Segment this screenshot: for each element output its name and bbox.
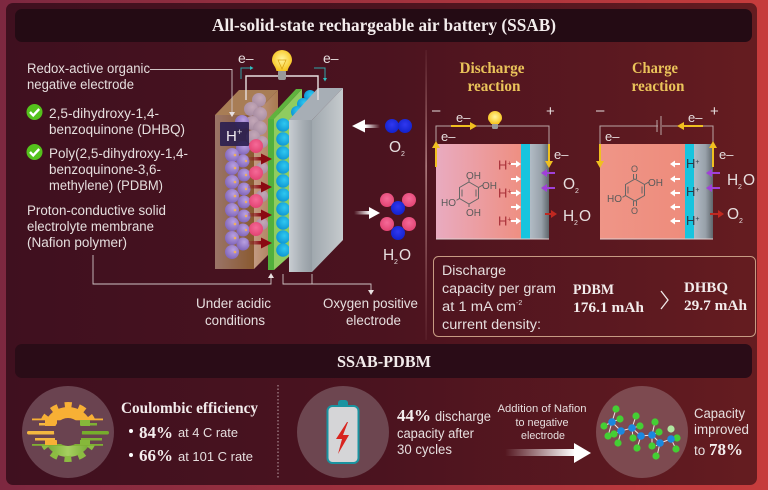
proton label: +	[237, 127, 242, 137]
polarity: –	[432, 102, 441, 119]
text block: capacity improved: 78%	[709, 440, 743, 459]
electrolyte membrane	[268, 89, 302, 270]
PDBM value: PDBM	[573, 282, 614, 298]
reaction species: H	[727, 172, 738, 189]
icon: polymer molecule	[596, 386, 688, 478]
text block: 44% discharge capacity	[397, 406, 491, 457]
capacity description: current density:	[442, 317, 541, 332]
proton labels: H	[686, 213, 695, 228]
capacity description: capacity per gram	[442, 281, 556, 296]
electron labels and arrows: e–	[238, 50, 254, 66]
proton labels: +	[695, 187, 699, 194]
proton flow arrows	[511, 160, 521, 224]
text block: capacity improved: Capacity	[694, 406, 745, 421]
polarity	[596, 102, 719, 120]
proton labels: H	[498, 186, 507, 200]
capacity description: at 1 mA cm	[442, 299, 516, 314]
title bar	[15, 9, 752, 42]
text block: 44% discharge capacity: 44%	[397, 406, 431, 425]
electron labels and arrows: e–	[323, 50, 339, 66]
reaction species: H	[563, 208, 574, 225]
O2 input: 2	[401, 151, 405, 158]
polarity	[432, 102, 555, 120]
leader arrowheads	[229, 112, 374, 295]
text block: 44% discharge capacity: capacity after	[397, 426, 474, 441]
text block: Coulombic efficiency: at 4 C rate	[178, 426, 238, 440]
text block: capacity improved	[694, 406, 749, 459]
power source symbol	[657, 116, 661, 135]
text block: addition of Nafion: Addition of Nafion	[498, 403, 586, 415]
text block: under acidic conditions: Under acidic	[196, 296, 271, 311]
reaction species: 2	[575, 188, 579, 195]
PDBM value: 176.1 mAh	[573, 300, 645, 316]
light bulb	[272, 50, 292, 80]
electron arrows: e–	[719, 147, 734, 162]
text block: 44% discharge capacity: 30 cycles	[397, 442, 452, 457]
proton labels: +	[507, 216, 511, 224]
list item: DHBQ: benzoquinone (DHBQ)	[49, 122, 185, 137]
H2O output: 2	[394, 259, 398, 266]
diagram: charge cell	[596, 102, 755, 240]
list item: PDBM: methylene) (PDBM)	[49, 178, 163, 193]
text block: negative electrode: negative electrode	[27, 77, 134, 92]
water and oxygen arrows	[706, 169, 724, 218]
quinone structure	[607, 164, 663, 216]
heading: discharge reaction	[460, 60, 525, 95]
text block: Coulombic efficiency: at 101 C rate	[178, 450, 253, 464]
H2O output	[354, 193, 416, 266]
section bar: SSAB-PDBM	[15, 344, 752, 378]
text block: membrane: electrolyte membrane	[27, 219, 154, 234]
DHBQ hydroquinone structure: HO	[441, 198, 456, 209]
text block: oxygen positive electrode: Oxygen positive	[323, 296, 418, 311]
quinone structure: O	[631, 206, 638, 216]
list item: DHBQ	[26, 104, 185, 137]
text block: Coulombic efficiency: 66%	[139, 446, 173, 465]
list item: PDBM: benzoquinone-3,6-	[49, 162, 161, 177]
text block: Coulombic efficiency: 84%	[139, 423, 173, 442]
text block: addition of Nafion: to negative	[516, 417, 568, 429]
small bulb	[488, 111, 502, 129]
cell body	[436, 126, 549, 240]
oxygen electrode plate	[289, 88, 343, 272]
text block: membrane	[27, 203, 166, 250]
proton arrows	[248, 154, 272, 248]
heading: charge reaction	[632, 60, 685, 95]
proton labels: +	[695, 159, 699, 166]
list item: PDBM	[26, 144, 188, 193]
DHBQ value: 29.7 mAh	[684, 298, 748, 314]
polarity: –	[596, 102, 605, 119]
text block: negative electrode: Redox-active organic	[27, 61, 150, 76]
electron arrows: e–	[441, 129, 456, 144]
greater-than symbol	[661, 291, 668, 309]
leader lines	[93, 70, 371, 290]
oxygen and water arrows	[541, 169, 557, 218]
DHBQ value: DHBQ	[684, 280, 728, 296]
proton labels	[686, 156, 699, 228]
DHBQ hydroquinone structure: OH	[466, 208, 481, 219]
proton labels: +	[507, 160, 511, 168]
DHBQ hydroquinone structure: OH	[482, 181, 497, 192]
quinone structure: HO	[607, 194, 622, 205]
text block: Coulombic efficiency	[121, 400, 258, 465]
text block: capacity improved: improved	[694, 422, 749, 437]
polarity: +	[710, 103, 719, 120]
icon: battery	[297, 386, 389, 478]
text block: addition of Nafion	[498, 403, 586, 442]
electron arrows: e–	[605, 129, 620, 144]
heading: charge reaction: reaction	[632, 78, 685, 95]
DHBQ value	[684, 280, 748, 314]
H2O output: O	[399, 247, 411, 264]
electron arrows	[596, 110, 734, 168]
icon: gear	[22, 386, 114, 478]
reaction species: 2	[574, 220, 578, 227]
reaction species	[727, 172, 755, 225]
text block: negative electrode	[27, 61, 150, 92]
section bar: SSAB-PDBM: SSAB-PDBM	[337, 352, 431, 371]
DHBQ hydroquinone structure: OH	[466, 171, 481, 182]
electron arrows: e–	[554, 147, 569, 162]
O2 input	[352, 119, 412, 158]
reaction species: O	[727, 206, 739, 223]
callout: discharge capacity comparison	[434, 256, 756, 336]
capacity description: -2	[516, 300, 522, 307]
title bar: All-solid-state rechargeable air battery (SSAB)	[212, 15, 556, 35]
proton labels: +	[695, 216, 699, 223]
quinone structure: O	[631, 164, 638, 174]
capacity description	[442, 263, 556, 332]
reaction species: 2	[738, 184, 742, 191]
reaction species: 2	[739, 218, 743, 225]
list item: DHBQ: 2,5-dihydroxy-1,4-	[49, 106, 159, 121]
diagram: discharge cell	[432, 102, 591, 240]
quinone structure: OH	[648, 178, 663, 189]
positive electrode spheres	[276, 90, 316, 257]
heading: discharge reaction: Discharge	[460, 60, 525, 77]
heading: charge reaction: Charge	[632, 60, 678, 77]
polarity: +	[546, 103, 555, 120]
protons	[249, 139, 263, 236]
proton labels: H	[686, 156, 695, 171]
reaction species: O	[579, 208, 591, 225]
text block: 44% discharge capacity: discharge	[435, 409, 491, 424]
text block: oxygen positive electrode: electrode	[346, 313, 401, 328]
reaction species	[563, 176, 591, 227]
text block: under acidic conditions: conditions	[205, 313, 265, 328]
text block: membrane: (Nafion polymer)	[27, 235, 127, 250]
DHBQ hydroquinone structure	[441, 171, 497, 219]
cell body	[600, 126, 713, 240]
reaction species: O	[743, 172, 755, 189]
reaction species: O	[563, 176, 575, 193]
proton labels: H	[498, 214, 507, 228]
text block: Coulombic efficiency: Coulombic efficiency	[121, 400, 258, 417]
text block: capacity improved: to	[694, 443, 705, 458]
electron labels and arrows	[238, 50, 339, 82]
electron arrows: e–	[456, 110, 471, 125]
proton label	[220, 122, 249, 146]
electron arrows	[432, 110, 569, 168]
text block: under acidic conditions	[196, 296, 271, 328]
capacity description: Discharge	[442, 263, 506, 278]
text block: membrane: Proton-conductive solid	[27, 203, 166, 218]
battery cell illustration	[215, 50, 343, 272]
PDBM value	[573, 282, 645, 316]
O2 input: O	[389, 139, 401, 156]
proton labels: H	[686, 184, 695, 199]
text block: addition of Nafion: electrode	[521, 430, 565, 442]
text block: oxygen positive electrode	[323, 296, 418, 328]
proton labels	[498, 158, 511, 228]
external circuit	[246, 76, 318, 100]
proton labels: H	[498, 158, 507, 172]
arrow: improvement	[505, 443, 591, 463]
negative electrode block	[215, 90, 278, 269]
heading: discharge reaction: reaction	[468, 78, 521, 95]
proton flow arrows	[670, 160, 680, 224]
organic molecule spheres	[225, 93, 268, 259]
list item: PDBM: Poly(2,5-dihydroxy-1,4-	[49, 146, 188, 161]
H2O output: H	[383, 247, 394, 264]
proton labels: +	[507, 188, 511, 196]
electron arrows: e–	[688, 110, 703, 125]
proton label: H	[226, 128, 237, 145]
